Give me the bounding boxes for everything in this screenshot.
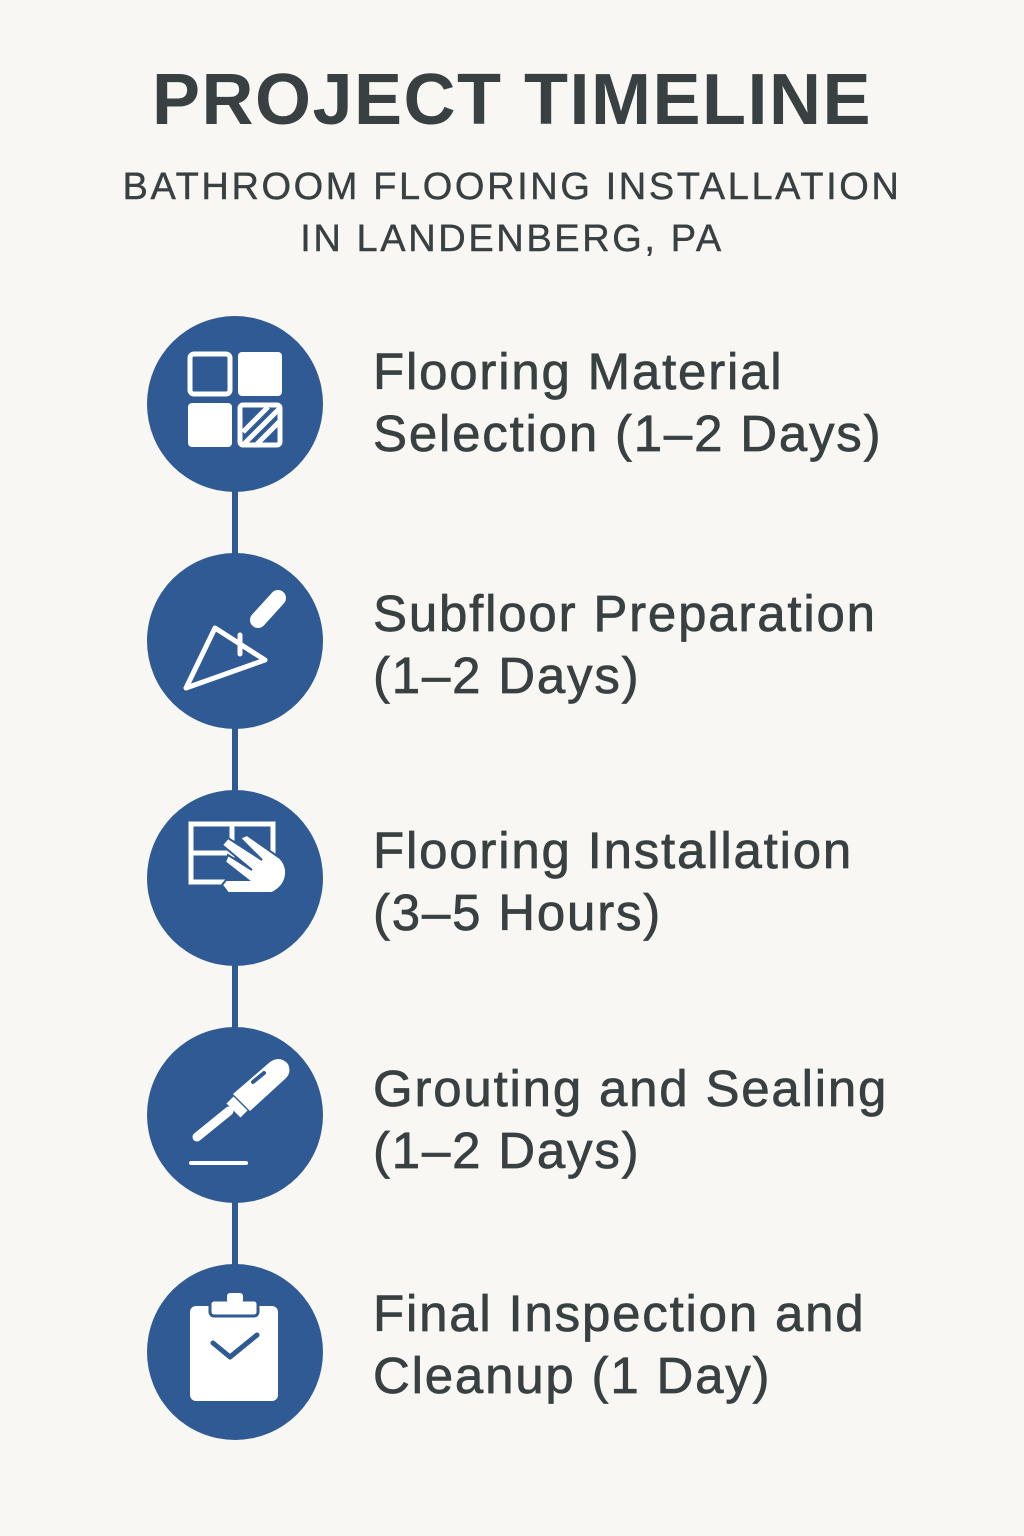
step 1 text: Selection (1–2 Days) xyxy=(373,405,882,462)
step 3 text: (3–5 Hours) xyxy=(373,884,662,941)
step 1 text xyxy=(373,343,882,462)
step 3 text xyxy=(373,822,853,941)
step 4 text xyxy=(373,1060,888,1179)
step 3 text: Flooring Installation xyxy=(373,822,853,879)
icon: hand on tiles xyxy=(147,790,323,966)
title: PROJECT TIMELINE xyxy=(152,60,872,140)
step 2 text: Subfloor Preparation xyxy=(373,585,877,642)
step 5 text: Cleanup (1 Day) xyxy=(373,1347,771,1404)
step 5 text xyxy=(373,1285,865,1404)
step 2 text xyxy=(373,585,877,704)
step 2 text: (1–2 Days) xyxy=(373,647,640,704)
icon: trowel xyxy=(147,553,323,729)
step 1 text: Flooring Material xyxy=(373,343,783,400)
icon: tiles xyxy=(147,316,323,492)
subtitle xyxy=(123,166,901,260)
icon: grout tool xyxy=(147,1027,323,1203)
subtitle: BATHROOM FLOORING INSTALLATION xyxy=(123,166,901,208)
step 4 text: Grouting and Sealing xyxy=(373,1060,888,1117)
step 5 text: Final Inspection and xyxy=(373,1285,865,1342)
step 4 text: (1–2 Days) xyxy=(373,1122,640,1179)
icon: clipboard xyxy=(147,1264,323,1440)
subtitle: IN LANDENBERG, PA xyxy=(300,218,724,260)
